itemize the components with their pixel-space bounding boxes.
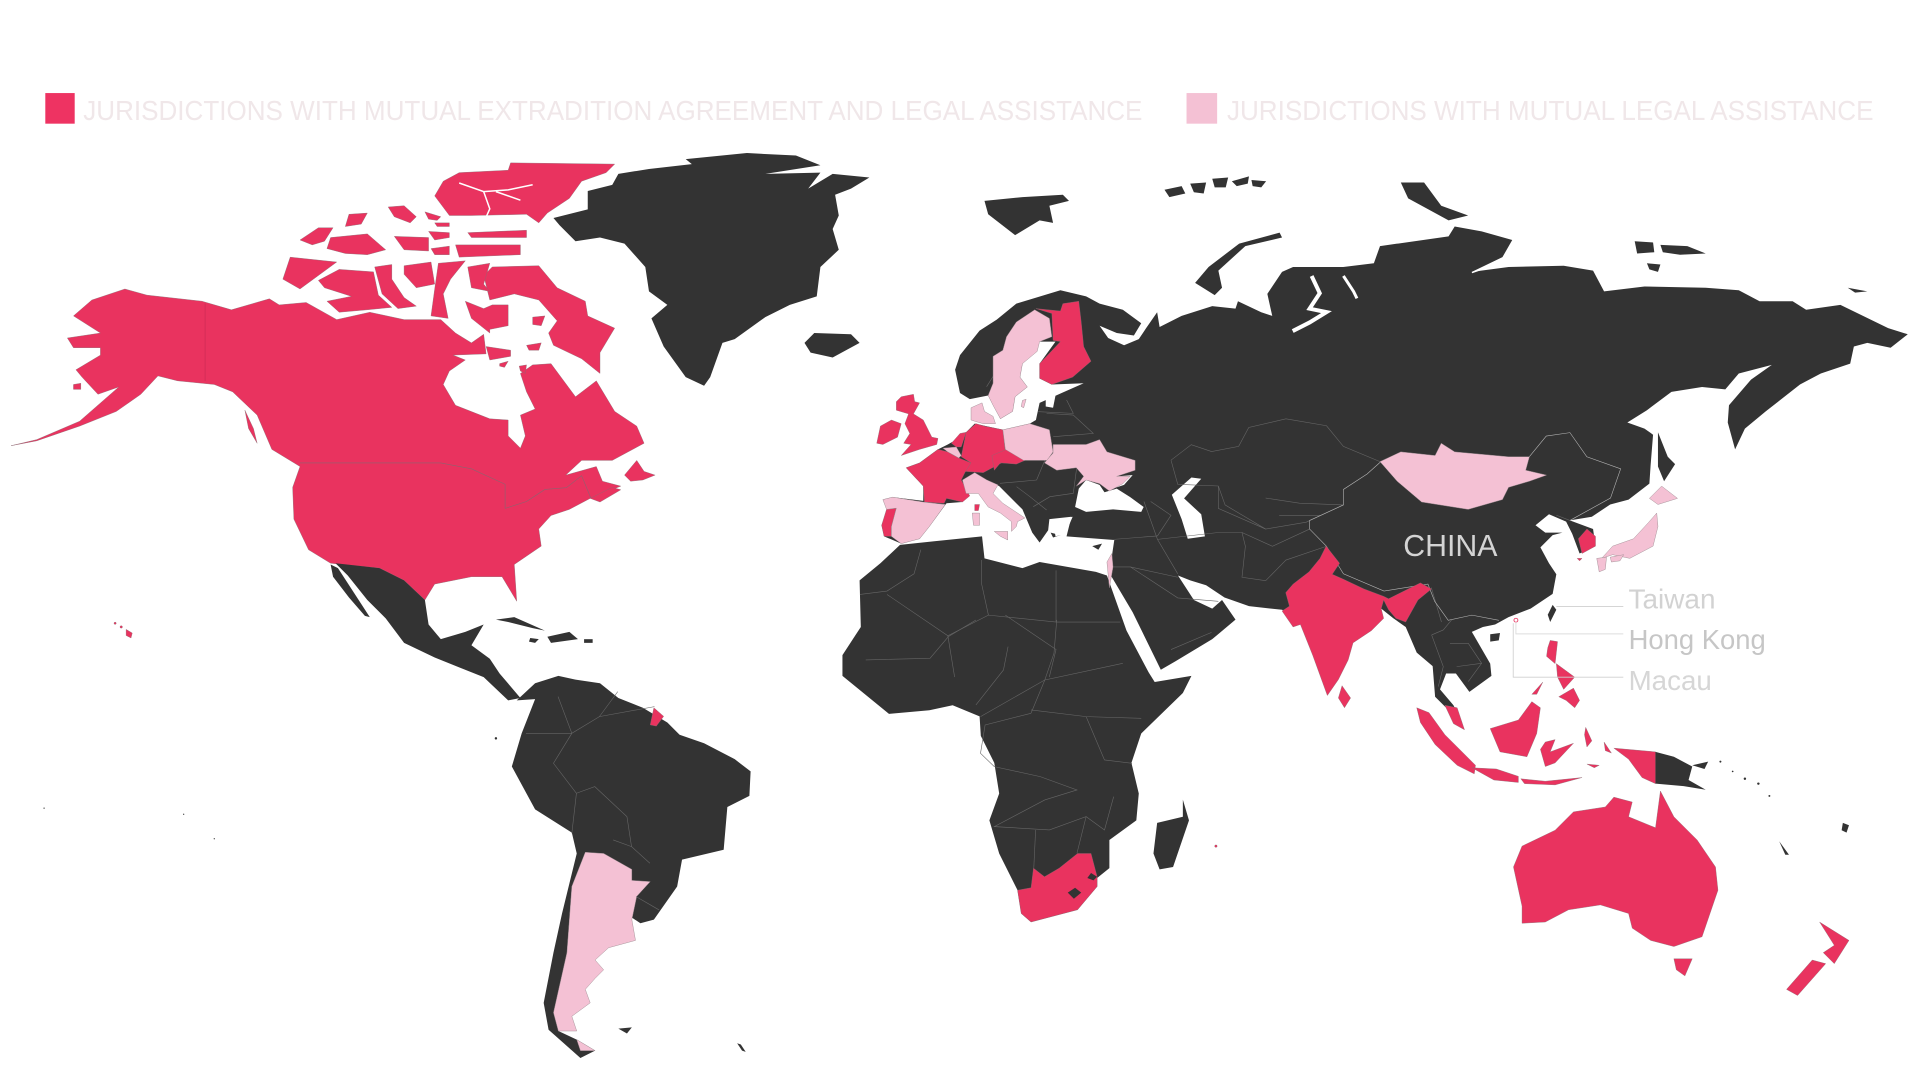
Europe: extradition jurisdictions (877, 301, 1091, 536)
French Guiana (650, 708, 664, 726)
callout: Hong Kong (1514, 618, 1766, 655)
borders: North Africa (860, 550, 1120, 677)
Eurasia landmass (882, 176, 1908, 722)
South America (512, 676, 751, 1058)
Ellesmere island fjords (459, 183, 533, 223)
Europe: legal assistance jurisdictions (883, 310, 1135, 588)
callout: Macau (1513, 623, 1712, 696)
Lesotho and Eswatini (1068, 873, 1097, 899)
South Africa (1018, 845, 1217, 922)
label: China: CHINA (1403, 529, 1498, 563)
Australia and New Zealand (1513, 791, 1849, 996)
callout: Macau: Macau (1629, 665, 1712, 696)
Asia-Pacific: India, Korea, Indonesia, Philippines (1282, 529, 1656, 785)
inland seas: Caspian, Black Sea, Azov, Aegean, Gulf of Riga (1046, 396, 1205, 539)
Greenland and Iceland (553, 153, 869, 386)
callout: Taiwan: Taiwan (1629, 584, 1716, 615)
callout: Hong Kong: Hong Kong (1629, 624, 1766, 655)
borders: Europe (987, 357, 1093, 510)
Argentina (553, 852, 650, 1051)
Mexico, Central America and Caribbean (331, 563, 593, 700)
Asia: Mongolia and Japan (1380, 443, 1678, 572)
legend: extradition and legal assistance: JURISDICTIONS WITH MUTUAL EXTRADITION AGREEMENT AND LEGAL ASSISTANCE (83, 95, 1142, 126)
borders: Africa (866, 620, 1141, 868)
borders: USA and Canada (205, 304, 591, 508)
legend: legal assistance: JURISDICTIONS WITH MUTUAL LEGAL ASSISTANCE (1227, 95, 1873, 126)
border: China (1310, 433, 1621, 620)
borders: Southeast Asia (1432, 620, 1482, 687)
Africa and Madagascar (842, 536, 1191, 922)
borders: South America (526, 692, 659, 910)
borders: Asia (1114, 419, 1570, 650)
Papua New Guinea and Pacific islands (43, 737, 1849, 855)
Siberian gulfs (1293, 259, 1512, 331)
North America: Canada, USA, Alaska (11, 163, 655, 638)
